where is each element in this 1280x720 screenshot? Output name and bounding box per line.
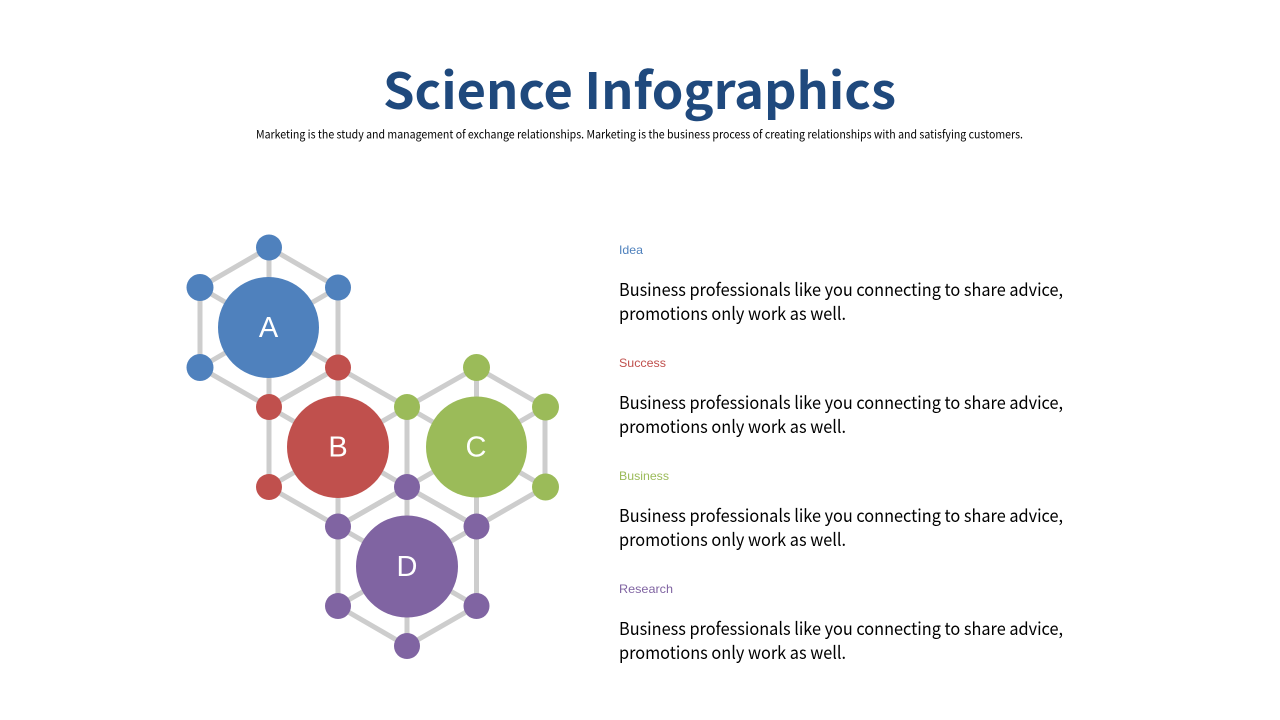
item: Business: Business [619, 469, 669, 483]
item: Research: Business professionals like you connecting to share advice, [619, 616, 1063, 641]
hexagon frame C [407, 368, 545, 526]
circle D: D [397, 551, 417, 583]
item: Success: Business professionals like you connecting to share advice, [619, 390, 1063, 415]
nodes D [325, 474, 490, 659]
nodes C [394, 354, 559, 500]
circle C [426, 396, 527, 498]
item: Idea: Business professionals like you connecting to share advice, [619, 277, 1063, 302]
circle A [218, 277, 319, 378]
item: Idea: Idea [619, 243, 643, 257]
item: Research [619, 582, 1063, 665]
circle C: C [466, 432, 486, 464]
nodes A [186, 234, 351, 381]
item: Idea: promotions only work as well. [619, 301, 846, 326]
item: Success [619, 356, 1063, 439]
item: Research: Research [619, 582, 673, 596]
hexagon frame B [269, 368, 407, 526]
item: Idea [619, 243, 1063, 326]
subtitle: Marketing is the study and management of exchange relationships. Marketing is the business process of creating relationships with and satisfying customers. [256, 126, 1023, 142]
hexagon frame D [338, 487, 476, 646]
hexagon frame A [200, 248, 338, 407]
circle B [287, 396, 389, 498]
item: Business: promotions only work as well. [619, 527, 846, 552]
molecule hexagon diagram [186, 234, 559, 659]
circle A: A [259, 312, 279, 344]
circle B: B [328, 432, 348, 464]
nodes B [256, 354, 351, 500]
item: Business: Business professionals like you connecting to share advice, [619, 503, 1063, 528]
item: Business [619, 469, 1063, 552]
item: Success: promotions only work as well. [619, 414, 846, 439]
item: Success: Success [619, 356, 666, 370]
title: Science Infographics [383, 52, 896, 124]
item: Research: promotions only work as well. [619, 640, 846, 665]
circle D [356, 516, 458, 618]
